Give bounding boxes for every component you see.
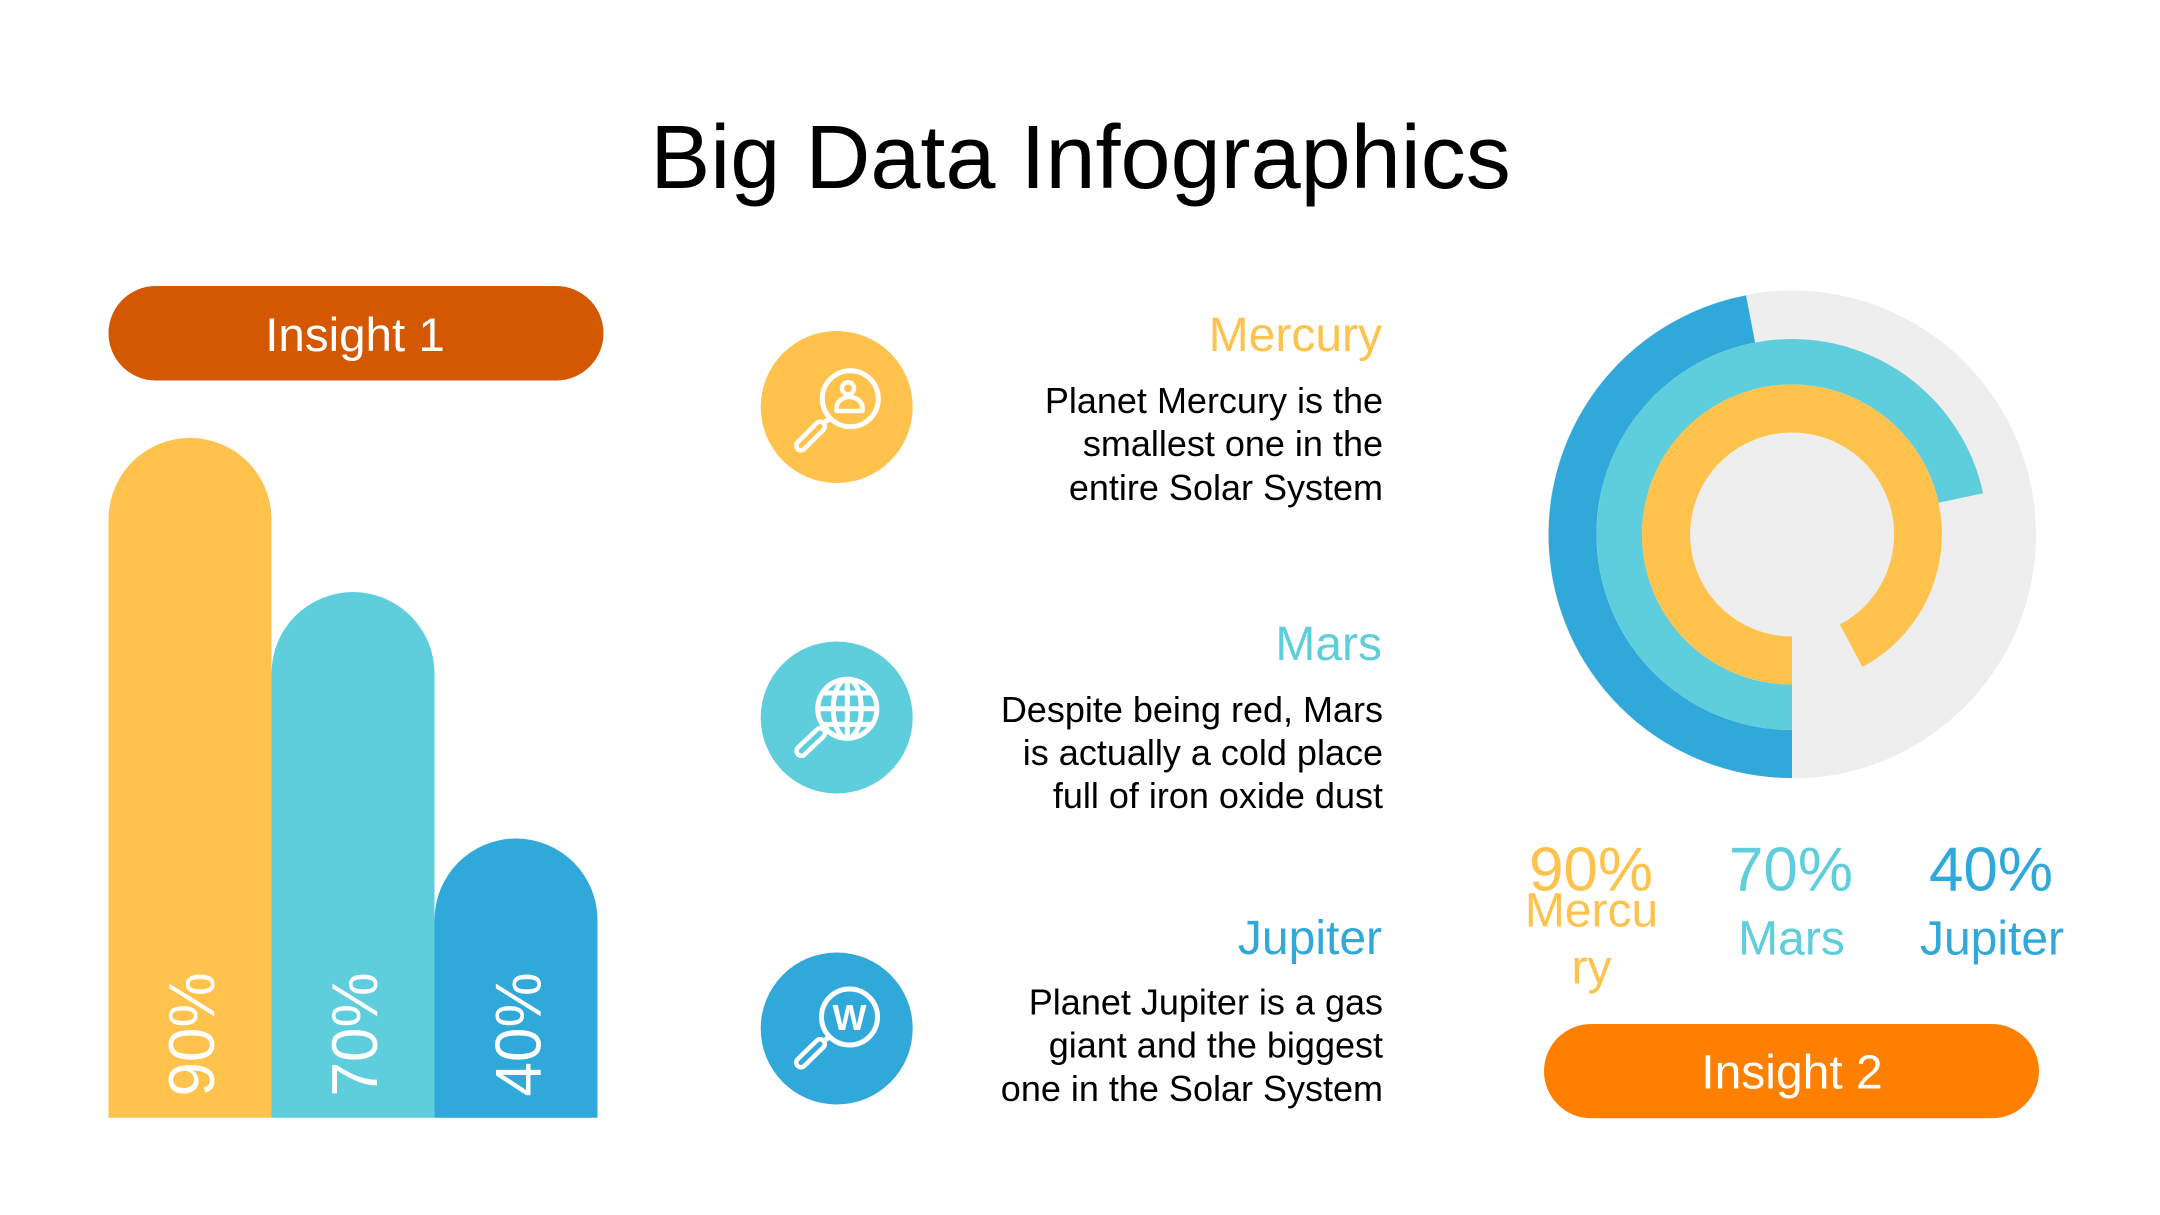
stat: Mars 70%: 70%	[1729, 836, 1853, 904]
ring: Jupiter	[1549, 295, 1792, 778]
bar: Jupiter 40%	[434, 838, 598, 1118]
bar: Mercury 90%: 90%	[156, 972, 228, 1096]
text block: Mercury	[1045, 309, 1383, 508]
text block: Mars: full of iron oxide dust	[1053, 775, 1383, 816]
stat: Jupiter 40%: Jupiter	[1920, 912, 2064, 966]
stat: Mercury 90%: 90%	[1529, 836, 1653, 904]
text block: Jupiter: Planet Jupiter is a gas	[1029, 982, 1383, 1022]
text block: Mars	[1001, 618, 1383, 816]
text block: Mars: is actually a cold place	[1023, 732, 1383, 773]
stat: Mercury 90%: ry	[1572, 942, 1611, 994]
text block: Jupiter	[1001, 912, 1383, 1109]
insight 1 pill	[108, 286, 604, 380]
insight 2 pill: Insight 2	[1701, 1046, 1883, 1100]
ring: Mars	[1597, 339, 1983, 730]
icon: magnifier with W: W	[833, 997, 867, 1038]
bar: Jupiter 40%: 40%	[482, 972, 555, 1096]
bar: Mars 70%	[272, 592, 434, 1118]
icon: magnifier with globe	[761, 642, 913, 794]
stat: Mercury 90%	[1525, 836, 1658, 994]
title: Big Data Infographics	[650, 108, 1511, 208]
text block: Jupiter: giant and the biggest	[1049, 1024, 1383, 1066]
text block: Mercury: Planet Mercury is the	[1045, 380, 1383, 421]
insight 1 pill: Insight 1	[265, 309, 445, 362]
ring: Mercury	[1642, 385, 1942, 685]
text block: Mercury: entire Solar System	[1069, 467, 1383, 508]
insight 2 pill	[1544, 1024, 2039, 1118]
text block: Mercury: Mercury	[1209, 309, 1382, 362]
icon: magnifier with W	[761, 952, 913, 1104]
panel: insight 1 bar chart	[108, 286, 604, 1118]
stat: Jupiter 40%: 40%	[1929, 836, 2053, 904]
stat: Mercury 90%: Mercu	[1525, 884, 1658, 938]
text block: Mars: Despite being red, Mars	[1001, 689, 1383, 730]
text block: Mercury: smallest one in the	[1083, 423, 1383, 464]
stat: Mars 70%: Mars	[1738, 912, 1845, 966]
text block: Jupiter: one in the Solar System	[1001, 1068, 1383, 1109]
stat: Jupiter 40%	[1920, 836, 2064, 966]
text block: Mars: Mars	[1275, 618, 1382, 671]
icon: magnifier with person	[761, 331, 913, 483]
text block: Jupiter: Jupiter	[1238, 912, 1382, 965]
radial bar chart	[1548, 290, 2036, 778]
bar: Mercury 90%	[108, 438, 272, 1118]
stat: Mars 70%	[1729, 836, 1853, 966]
bar: Mars 70%: 70%	[319, 972, 391, 1096]
